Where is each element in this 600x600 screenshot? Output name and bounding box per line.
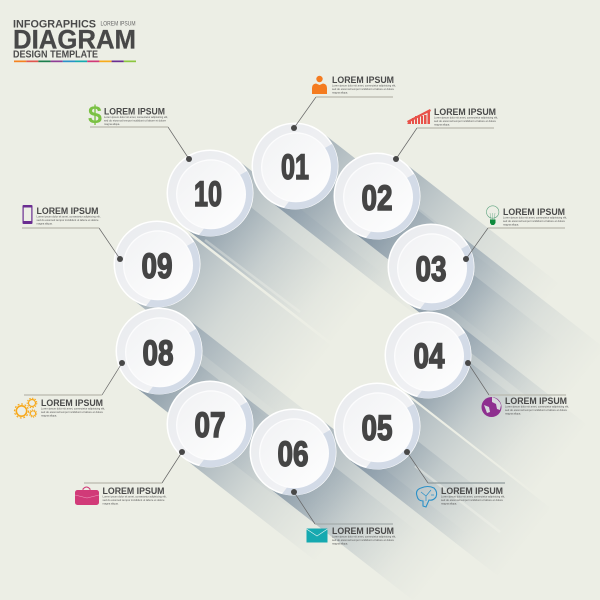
- callout 03: LOREM IPSUM: [503, 207, 565, 218]
- icon: gears: [14, 398, 37, 418]
- callout 07: Lorem ipsum dolor sit amet, consectetur adipisicing elit,: [102, 494, 167, 498]
- circle 05: [334, 382, 420, 470]
- circle 06: [250, 408, 336, 496]
- icon: bar chart: [407, 109, 431, 124]
- callout 09: magna aliqua.: [36, 222, 53, 226]
- callout 04: [465, 360, 569, 417]
- callout 06: LOREM IPSUM: [332, 526, 394, 537]
- callout 04: sed do eiusmod tempor incididunt ut labore et dolore: [505, 408, 567, 412]
- callout 10: magna aliqua.: [104, 122, 120, 126]
- callout 10: sed do eiusmod tempor incididunt ut labore et dolore: [104, 118, 166, 122]
- callout 04: magna aliqua.: [505, 412, 521, 416]
- callout 08: LOREM IPSUM: [41, 398, 103, 409]
- icon: globe: [482, 397, 502, 417]
- circle 10: [166, 150, 254, 236]
- callout 02: sed do eiusmod tempor incididunt ut labore et dolore: [434, 119, 496, 123]
- circle 07: [166, 380, 254, 468]
- circle 01: [252, 122, 338, 210]
- callout 09: sed do eiusmod tempor incididunt ut labore et dolore: [36, 218, 99, 222]
- callout 02: LOREM IPSUM: [434, 107, 496, 118]
- circle 06: 06: [278, 435, 308, 474]
- circle 03: 03: [416, 250, 446, 289]
- callout 01: [291, 75, 396, 131]
- callout 09: [22, 205, 123, 262]
- title: design template: DESIGN TEMPLATE: [13, 50, 98, 60]
- callout 05: magna aliqua.: [441, 502, 457, 506]
- icon: briefcase: [75, 487, 99, 505]
- callout 03: [463, 206, 567, 262]
- callout 10: [88, 101, 192, 162]
- colour stripe: [14, 60, 136, 62]
- callout 01: sed do eiusmod tempor incididunt ut labore et dolore: [332, 87, 394, 91]
- callout 08: Lorem ipsum dolor sit amet, consectetur adipisicing elit,: [41, 406, 105, 410]
- icon: person: [312, 76, 327, 94]
- callout 05: Lorem ipsum dolor sit amet, consectetur adipisicing elit,: [441, 494, 505, 498]
- callout 05: sed do eiusmod tempor incididunt ut labore et dolore: [441, 498, 503, 502]
- callout 10: LOREM IPSUM: [104, 106, 165, 118]
- icon: light bulb: [486, 206, 499, 225]
- circle 08: [116, 308, 202, 394]
- icon: phone: [22, 205, 32, 224]
- callout 06: sed do eiusmod tempor incididunt ut labore et dolore: [332, 538, 394, 542]
- callout 02: magna aliqua.: [434, 122, 450, 126]
- circle 10: 10: [194, 175, 222, 214]
- circle 04: [384, 312, 472, 398]
- callout 08: magna aliqua.: [41, 414, 57, 418]
- callout 01: LOREM IPSUM: [332, 75, 394, 86]
- callout 09: Lorem ipsum dolor sit amet, consectetur adipisicing elit,: [36, 214, 101, 218]
- callout 02: [393, 107, 498, 162]
- callout 04: LOREM IPSUM: [505, 396, 567, 407]
- callout 06: magna aliqua.: [332, 542, 348, 546]
- callout 03: sed do eiusmod tempor incididunt ut labore et dolore: [503, 219, 565, 223]
- callout 04: Lorem ipsum dolor sit amet, consectetur adipisicing elit,: [505, 404, 569, 408]
- callout 07: LOREM IPSUM: [102, 486, 165, 497]
- callout 08: [14, 360, 125, 418]
- circle 09: 09: [142, 247, 172, 286]
- callout 07: [75, 449, 185, 506]
- callout 01: magna aliqua.: [332, 90, 348, 94]
- icon: brain: [416, 486, 437, 507]
- circle 01: 01: [281, 148, 309, 187]
- callout 02: Lorem ipsum dolor sit amet, consectetur adipisicing elit,: [434, 116, 498, 120]
- callout 03: Lorem ipsum dolor sit amet, consectetur adipisicing elit,: [503, 216, 567, 220]
- callout 06: Lorem ipsum dolor sit amet, consectetur adipisicing elit,: [332, 534, 396, 538]
- circle 09: [114, 220, 200, 308]
- title: infographics: INFOGRAPHICS: [13, 18, 96, 30]
- callout 05: [404, 449, 505, 507]
- callout 07: magna aliqua.: [102, 502, 119, 506]
- circle 02: 02: [362, 179, 392, 218]
- callout 01: Lorem ipsum dolor sit amet, consectetur adipisicing elit,: [332, 84, 396, 88]
- callout 09: LOREM IPSUM: [36, 206, 99, 217]
- circle 02: [334, 152, 420, 240]
- circle 07: 07: [194, 406, 226, 445]
- callout 10: Lorem ipsum dolor sit amet, consectetur adipisicing elit,: [104, 115, 168, 119]
- circle 04: 04: [414, 337, 445, 376]
- title block: [13, 18, 136, 62]
- icon: dollar: $: [88, 101, 102, 129]
- long shadows: [131, 132, 600, 600]
- circle 08: 08: [142, 334, 174, 373]
- callout 05: LOREM IPSUM: [441, 486, 503, 497]
- circle 05: 05: [362, 409, 392, 448]
- callout 06: [291, 489, 396, 546]
- callout 08: sed do eiusmod tempor incididunt ut labore et dolore: [41, 410, 103, 414]
- callout 07: sed do eiusmod tempor incididunt ut labore et dolore: [102, 498, 165, 502]
- callout 03: magna aliqua.: [503, 222, 519, 226]
- subtitle: lorem ipsum: LOREM IPSUM: [100, 22, 136, 28]
- circle 03: [388, 224, 474, 310]
- icon: envelope: [306, 528, 328, 542]
- title: diagram: DIAGRAM: [13, 24, 136, 54]
